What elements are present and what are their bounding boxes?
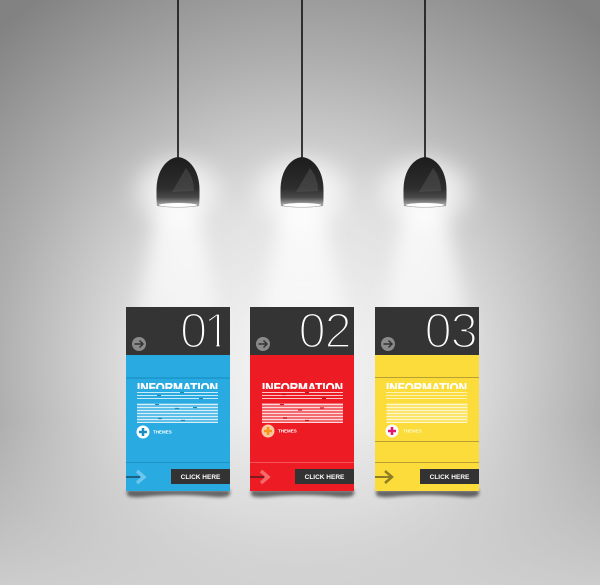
shadow (376, 490, 479, 497)
button (420, 469, 479, 484)
button: CLICK HERE (430, 474, 470, 481)
label: THEMES (153, 430, 172, 434)
plus icon (386, 424, 398, 438)
header (375, 307, 479, 355)
card body (126, 355, 230, 491)
header (250, 307, 354, 355)
arrow icon (132, 337, 146, 351)
plus icon (262, 424, 274, 438)
card 1: blue (126, 304, 231, 497)
chevron arrow (126, 471, 144, 483)
chevron arrow (250, 471, 268, 483)
plus icon (136, 426, 150, 438)
number: 03 (424, 304, 478, 358)
card body (250, 355, 354, 491)
number: 02 (298, 304, 352, 358)
button (295, 469, 354, 484)
label: THEMES (278, 428, 297, 434)
header (126, 307, 230, 355)
arrow icon (381, 337, 395, 351)
light glow and beams (126, 150, 480, 345)
button: CLICK HERE (305, 474, 345, 481)
card 2: red (250, 304, 354, 497)
arrow icon (256, 337, 270, 351)
button: CLICK HERE (181, 474, 221, 481)
chevron arrow (375, 471, 392, 483)
body lines (262, 392, 343, 423)
body lines (137, 392, 218, 423)
shadow (127, 490, 230, 497)
lamp 2 (280, 0, 324, 208)
shadow (251, 490, 354, 497)
card 3: yellow (375, 304, 479, 497)
lamp 3 (404, 0, 446, 208)
button (171, 469, 230, 484)
card body (375, 355, 479, 491)
body lines (386, 392, 468, 423)
number: 01 (180, 304, 231, 358)
label: THEMES (403, 428, 422, 434)
lamp 1 (156, 0, 200, 208)
